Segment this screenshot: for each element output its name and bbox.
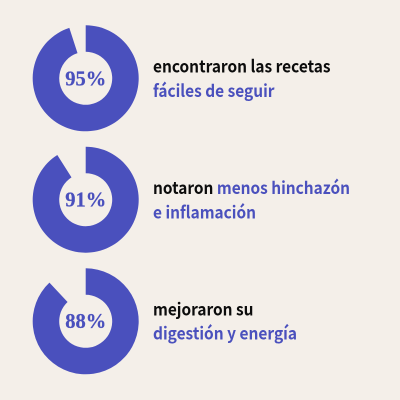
text: less bloating and inflammation bbox=[153, 174, 350, 223]
text: recipes easy to follow: encontraron las recetas bbox=[153, 52, 330, 78]
text: less bloating and inflammation: notaron menos hinchazón bbox=[153, 174, 350, 199]
text: recipes easy to follow bbox=[153, 52, 330, 102]
donut chart: 95%: 95% bbox=[65, 66, 106, 90]
text: improved digestion and energy: mejoraron su bbox=[153, 296, 254, 321]
text: less bloating and inflammation: e inflamación bbox=[153, 198, 256, 223]
donut chart: 91%: 91% bbox=[65, 187, 106, 211]
text: improved digestion and energy bbox=[153, 296, 297, 344]
donut chart: 95% bbox=[33, 25, 139, 131]
donut chart: 88%: 88% bbox=[65, 309, 106, 333]
text: improved digestion and energy: digestión y energía bbox=[153, 320, 297, 344]
text: recipes easy to follow: fáciles de seguir bbox=[153, 77, 275, 102]
donut chart: 88% bbox=[33, 268, 139, 374]
donut chart: 91% bbox=[33, 147, 139, 253]
